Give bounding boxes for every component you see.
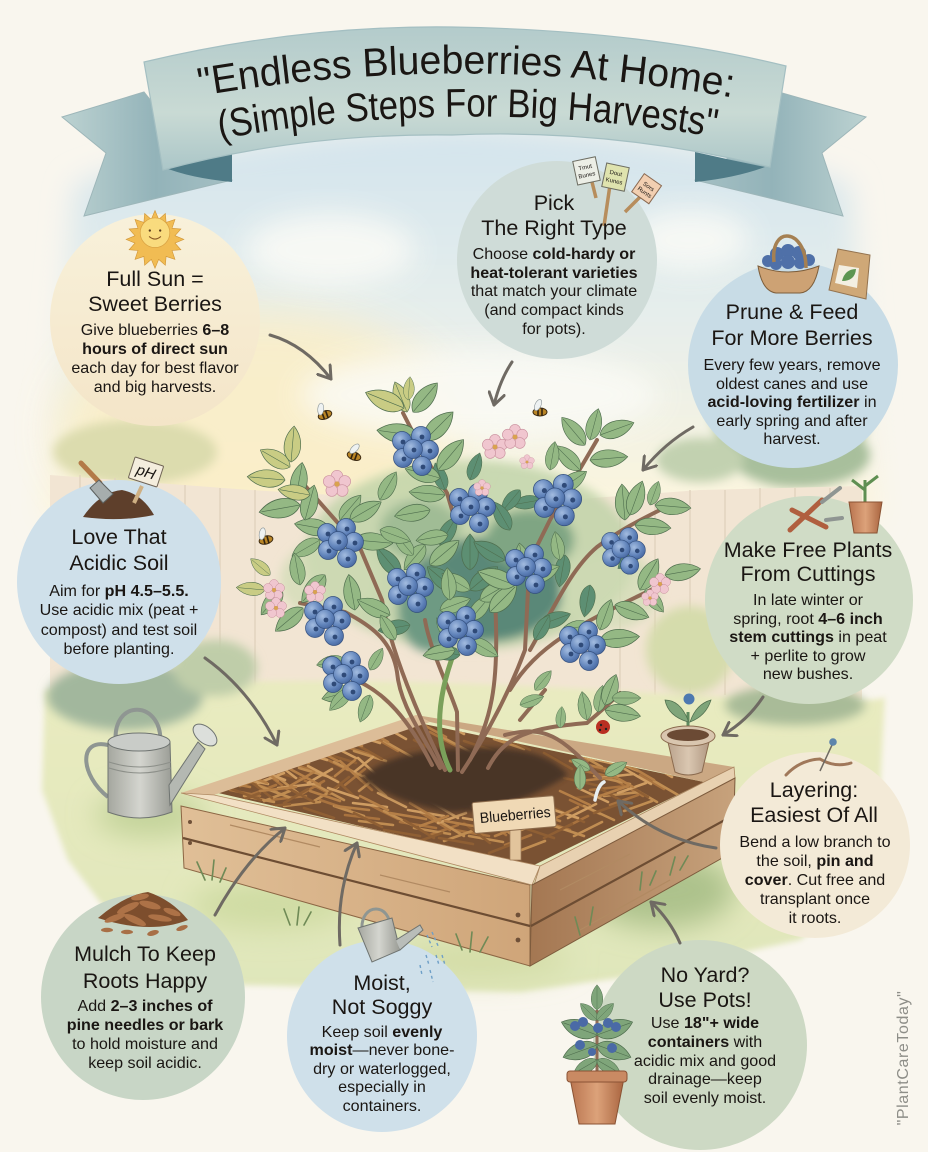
small pot on bed [661,694,715,775]
body: stem cuttings in peat [729,628,887,646]
pine needles [214,718,678,853]
circle: pick the right type [457,157,662,359]
blueberry clusters [304,426,645,700]
body: spring, root 4–6 inch [733,610,883,628]
body: Keep soil evenly [322,1023,442,1041]
body: early spring and after [716,412,868,430]
heading: Pick [534,191,575,215]
distant trees [53,343,870,487]
heading: From Cuttings [740,562,876,586]
body: keep soil acidic. [88,1054,202,1072]
bed left rim [181,715,430,795]
raised wooden bed [181,715,735,966]
body: pine needles or bark [67,1016,223,1034]
heading: Mulch To Keep [74,942,216,966]
body: Add 2–3 inches of [77,997,213,1015]
grass shadows [95,793,735,978]
body: cover. Cut free and [745,871,885,889]
arrows [205,335,763,945]
ribbon folds [163,152,232,182]
body: + perlite to grow [751,647,866,665]
body: Use 18"+ wide [651,1014,759,1032]
title ribbon [61,26,867,217]
title text: "Endless Blueberries At Home: [197,44,732,97]
grass tufts [197,856,688,952]
grass lawn [42,681,886,992]
body: compost) and test soil [41,621,197,639]
ribbon left tail [62,92,232,216]
warm sunlight [60,310,460,550]
circle: full sun [50,211,260,426]
icon: sun [126,211,184,268]
body: containers. [343,1097,421,1115]
bed right face [530,778,735,966]
bees [255,398,547,546]
bed back rim [416,715,734,782]
flowers [264,424,670,618]
icon: plant signs: Kunes [605,177,623,187]
shrubs [47,606,865,730]
icon: soil, trowel, pH sign [81,457,164,519]
body: Aim for pH 4.5–5.5. [49,582,189,600]
plant label: Blueberries [472,796,556,860]
bed front rim [181,793,540,885]
plank seams [183,815,734,926]
body: it roots. [789,909,841,927]
body: acid-loving fertilizer in [707,393,877,411]
body: heat-tolerant varieties [470,264,638,282]
bush leaves: dark inner [371,451,644,662]
ribbon right tail [695,93,866,216]
arrow: prune to bush [643,427,693,470]
heading: Layering: [770,778,858,802]
body: drainage—keep [648,1070,762,1088]
heading: Make Free Plants [724,538,892,562]
icon: potted blueberry [559,985,635,1124]
green cane [440,650,455,770]
icon: berry basket [758,236,819,293]
circle: pots [559,940,807,1150]
body: Give blueberries 6–8 [81,321,229,339]
icon: pruners [790,488,842,530]
body: each day for best flavor [71,359,239,377]
body: acidic mix and good [634,1052,776,1070]
heading: Moist, [353,971,411,995]
ribbon banner [144,27,786,170]
body: before planting. [64,640,174,658]
title text [197,44,732,146]
arrow: type to bush [494,362,512,405]
heading: Prune & Feed [726,300,858,324]
body: moist—never bone- [310,1041,454,1059]
circle: moist [287,909,477,1132]
body: hours of direct sun [82,340,228,358]
body: transplant once [760,890,870,908]
icon: plant signs: Sors [641,181,655,193]
blueberry bush [236,376,702,790]
body: new bushes. [763,665,853,683]
plant label: Blueberries: Blueberries [479,804,551,827]
heading: For More Berries [711,326,873,350]
heading: Sweet Berries [88,292,222,316]
body: containers with [648,1033,762,1051]
arrow: sun to bush [270,335,331,379]
body: (and compact kinds [484,301,624,319]
layering pin [595,782,604,800]
heading: Not Soggy [332,995,432,1019]
arrow: soil to bed [205,658,277,745]
heading: Easiest Of All [750,803,878,827]
body: Use acidic mix (peat + [40,601,198,619]
bush leaves: mid green [255,377,702,790]
bush branches [300,413,665,778]
icon: soil, trowel, pH sign: pH [133,461,158,484]
bush foliage backdrop [280,460,660,652]
clouds [245,210,750,440]
circle: layering [720,738,910,938]
body: and big harvests. [94,378,216,396]
bed right rim [534,767,735,885]
body: for pots). [522,320,586,338]
body: Bend a low branch to [739,833,891,851]
body: to hold moisture and [72,1035,218,1053]
arrow: layering to pin [618,801,716,848]
screws [188,820,520,942]
arrow: cuttings to pot [723,697,763,735]
circle: mulch [41,892,245,1100]
sky [42,125,880,520]
heading: Roots Happy [83,969,207,993]
body: Choose cold-hardy or [473,245,635,263]
icon: seedling pot [849,476,882,533]
heading: No Yard? [661,963,749,987]
heading: Love That [71,525,167,549]
title text: (Simple Steps For Big Harvests" [220,88,719,146]
arrow: pots to bed [651,902,680,943]
body: harvest. [763,430,821,448]
circle: acidic soil [17,457,221,684]
icon: plant signs: Runts [636,186,652,200]
icon: branch and pin [786,738,851,775]
body: In late winter or [753,591,864,609]
large watering can [86,710,221,818]
body: oldest canes and use [716,375,868,393]
circle: prune and feed [688,236,898,468]
icon: wood chips [98,892,188,937]
arrow: mulch to bed [215,828,285,915]
body: Every few years, remove [703,356,881,374]
bed front face [181,806,530,966]
ladybug [596,720,610,734]
heading: Use Pots! [658,988,752,1012]
heading: Full Sun = [106,267,204,291]
body: the soil, pin and [756,852,874,870]
icon: plant signs: Dout [609,170,623,178]
bush leaves: yellow green [236,376,415,597]
icon: plant signs: Bunes [578,171,596,181]
icon: small watering can [358,909,445,982]
icon: plant signs [573,157,662,226]
background: garden scene [42,125,886,992]
watermark: "PlantCareToday" [895,991,912,1125]
heading: Acidic Soil [69,551,169,575]
body: especially in [338,1078,426,1096]
bed soil mound [360,748,568,812]
body: dry or waterlogged, [313,1060,451,1078]
body: that match your climate [471,282,637,300]
icon: plant signs: Tmut [578,164,593,172]
icon: fertilizer bag [829,249,870,299]
arrow: moist to bed [339,843,357,945]
bed interior mulch [214,722,704,866]
body: soil evenly moist. [644,1089,766,1107]
circle: cuttings [705,476,913,704]
fence [50,475,862,700]
heading: The Right Type [481,216,627,240]
